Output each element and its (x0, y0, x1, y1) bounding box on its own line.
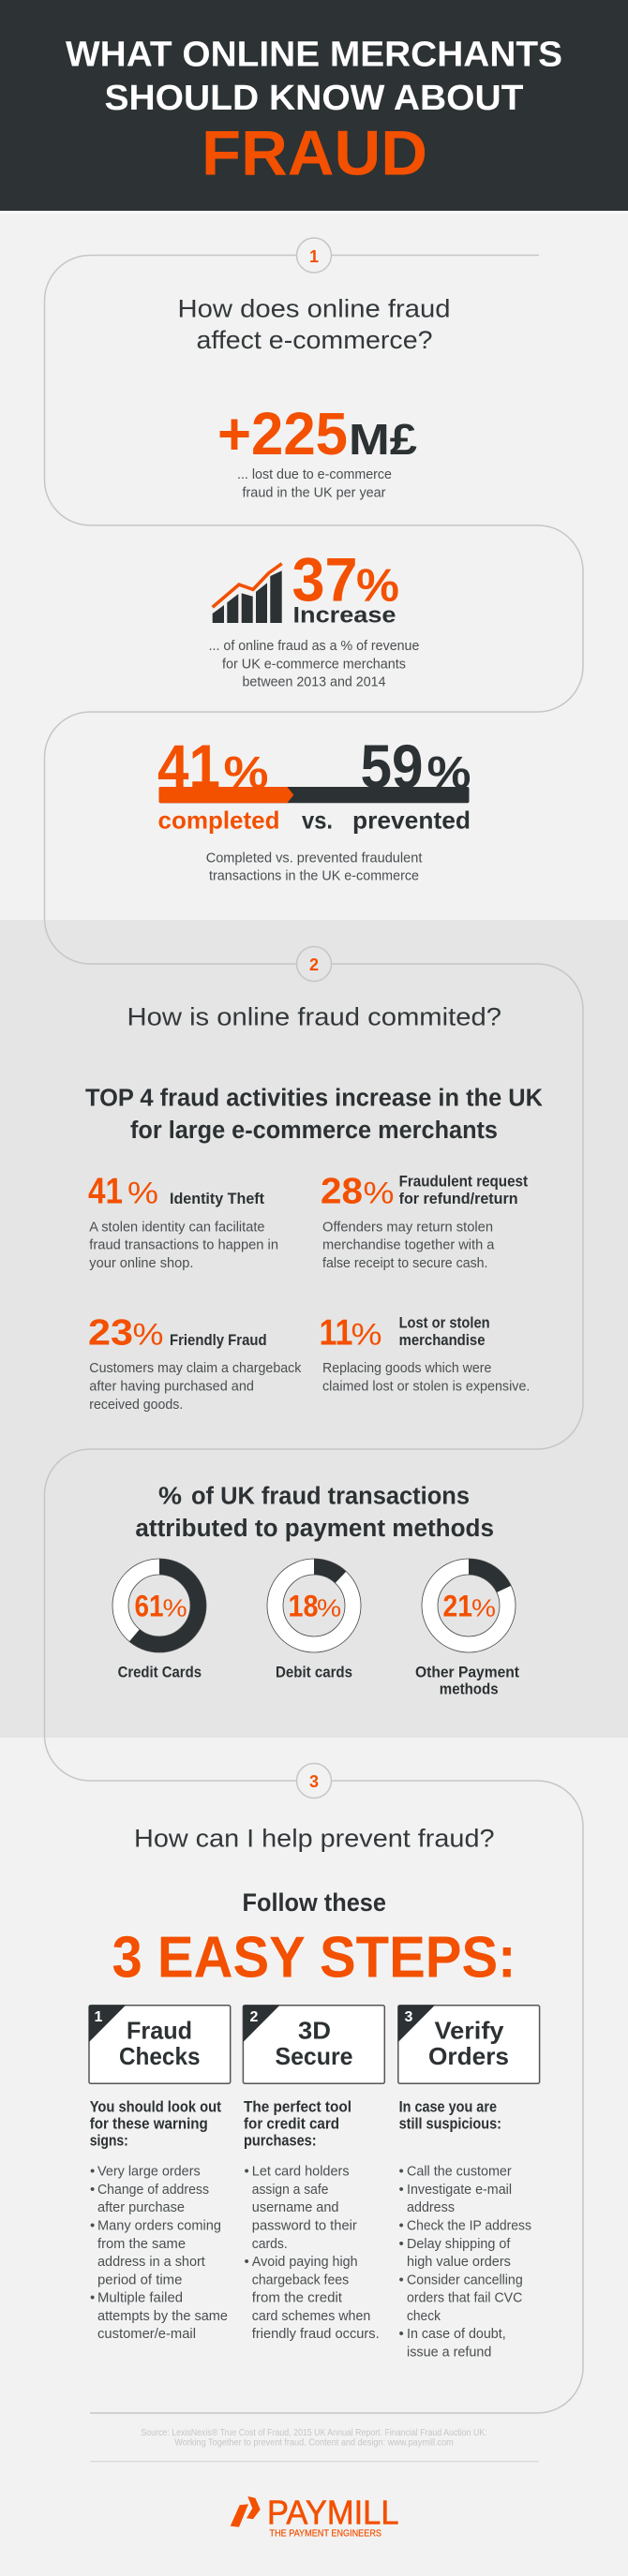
stat: 225M pounds lost: ... lost due to e-commerce (237, 466, 392, 482)
step marker 2 (296, 946, 332, 982)
heading: how does online fraud affect e-commerce (178, 295, 450, 354)
heading: top 4 fraud activities: TOP 4 fraud activities increase in the UK (85, 1085, 544, 1111)
step 1 details: warning signs: You should look out (90, 2098, 221, 2115)
source note: Source: LexisNexis® True Cost of Fraud, 2015 UK Annual Report. Financial Fraud Auction UK: (141, 2427, 487, 2438)
step 1 details: warning signs: Very large orders (97, 2164, 201, 2180)
fraud activity: lost or stolen merchandise: Lost or stolen (399, 1315, 490, 1332)
donut chart: debit cards 18%: 18 (289, 1589, 319, 1622)
fraud activity: identity theft: % (127, 1177, 158, 1210)
fraud activity: friendly fraud: % (133, 1317, 163, 1351)
step 2 details: credit card tool: Avoid paying high (252, 2254, 358, 2270)
stat: 37% increase (292, 545, 399, 628)
connector line (44, 255, 583, 2413)
text: online fraud as percent of revenue: ... of online fraud as a % of revenue (209, 638, 419, 654)
step card 2: 3D secure: 3D (298, 2017, 331, 2045)
header banner: FRAUD (202, 117, 427, 188)
fraud activity: friendly fraud: 23 (88, 1312, 133, 1353)
text: completed vs prevented caption: transactions in the UK e-commerce (209, 868, 419, 884)
step marker 1: 1 (309, 247, 319, 266)
step 2 details: credit card tool: password to their (252, 2218, 357, 2233)
step card 1: fraud checks (89, 2006, 231, 2083)
step 3 details: verification actions (399, 2098, 531, 2360)
donut chart: credit cards 61%: Credit Cards (118, 1665, 202, 1681)
stat: 225M pounds lost: fraud in the UK per year (242, 485, 386, 501)
step card 2: 3D secure: 2 (250, 2009, 259, 2025)
step 3 details: verification actions: • (399, 2182, 404, 2198)
heading: follow these 3 easy steps: 3 EASY STEPS: (112, 1926, 516, 1991)
step 1 details: warning signs: from the same (97, 2236, 186, 2252)
fraud activity: identity theft: fraud transactions to happen in (89, 1237, 278, 1253)
step 3 details: verification actions: Call the customer (407, 2164, 512, 2180)
fraud activity: friendly fraud: Friendly Fraud (170, 1332, 267, 1349)
chart: completed vs prevented bar: vs. (302, 806, 333, 834)
chart: completed vs prevented bar: % (427, 748, 471, 798)
step 1 details: warning signs: after purchase (97, 2199, 185, 2215)
step 1 details: warning signs: signs: (90, 2132, 128, 2149)
step 2 details: credit card tool: card schemes when (252, 2308, 370, 2324)
logo: Paymill (231, 2493, 399, 2539)
step 3 details: verification actions: Investigate e-mail (407, 2182, 512, 2198)
donut chart: credit cards 61%: % (163, 1593, 187, 1621)
heading: how is online fraud commited: How is online fraud commited? (127, 1003, 501, 1031)
donut chart: credit cards 61%: 61 (135, 1589, 163, 1622)
heading: percent of UK fraud transactions: % (158, 1484, 182, 1510)
step 2 details: credit card tool: The perfect tool (244, 2098, 351, 2115)
step 1 details: warning signs: • (90, 2164, 95, 2180)
stat: 37% increase: Increase (292, 602, 396, 628)
step 3 details: verification actions: address (407, 2199, 455, 2215)
step 1 details: warning signs: • (90, 2218, 95, 2233)
stat: 37% increase: % (356, 560, 399, 611)
fraud activity: friendly fraud: Customers may claim a chargeback (89, 1360, 302, 1376)
step 3 details: verification actions: still suspicious: (399, 2115, 501, 2132)
chart: completed vs prevented bar (157, 732, 471, 834)
text: online fraud as percent of revenue: between 2013 and 2014 (242, 674, 386, 690)
heading: percent of UK fraud transactions (135, 1484, 494, 1542)
text: online fraud as percent of revenue: for UK e-commerce merchants (222, 656, 406, 672)
donut chart: other payment methods 21%: Other Payment (415, 1665, 519, 1681)
source note: Working Together to prevent fraud. Content and design: www.paymill.com (174, 2437, 454, 2449)
step 2 details: credit card tool: from the credit (252, 2290, 343, 2306)
fraud activity: identity theft (88, 1171, 278, 1271)
step 2 details: credit card tool: purchases: (244, 2132, 317, 2149)
fraud activity: fraudulent refund request: Offenders may return stolen (322, 1219, 493, 1235)
step 2 details: credit card tool: username and (252, 2199, 339, 2215)
step 3 details: verification actions: In case you are (399, 2098, 497, 2115)
step marker 1 (296, 238, 332, 273)
heading: top 4 fraud activities: for large e-commerce merchants (130, 1118, 498, 1144)
step 2 details: credit card tool: chargeback fees (252, 2272, 349, 2287)
step 2 details: credit card tool: • (244, 2164, 249, 2180)
step 2 details: credit card tool: cards. (252, 2236, 288, 2252)
text: completed vs prevented caption: Completed vs. prevented fraudulent (206, 850, 423, 866)
fraud activity: identity theft: A stolen identity can facilitate (89, 1219, 264, 1235)
header banner: WHAT ONLINE MERCHANTS (66, 35, 562, 74)
step card 1: fraud checks: 1 (95, 2009, 103, 2025)
heading: follow these 3 easy steps: Follow these (242, 1888, 386, 1917)
step 3 details: verification actions: • (399, 2326, 404, 2342)
fraud activity: fraudulent refund request: false receipt to secure cash. (322, 1255, 487, 1271)
step 1 details: warning signs: address in a short (97, 2254, 206, 2270)
chart: completed vs prevented bar: completed (157, 806, 279, 834)
chart: completed vs prevented bar: % (223, 748, 268, 798)
fraud activity: identity theft: 41 (88, 1171, 123, 1212)
fraud activity: identity theft: your online shop. (89, 1255, 193, 1271)
step 3 details: verification actions: issue a refund (407, 2344, 491, 2360)
step card 1: fraud checks: Fraud (127, 2017, 192, 2045)
donut chart: credit cards 61% (112, 1559, 206, 1681)
step card 1: fraud checks: Checks (119, 2042, 201, 2070)
step marker 2: 2 (309, 955, 319, 974)
heading: top 4 fraud activities (85, 1085, 544, 1144)
stat: 225M pounds lost: M£ (349, 415, 417, 464)
chart: completed vs prevented bar: 41 (157, 732, 220, 801)
fraud activity: lost or stolen merchandise: claimed lost or stolen is expensive. (322, 1379, 530, 1394)
step 1 details: warning signs: for these warning (90, 2115, 208, 2132)
step 2 details: credit card tool: for credit card (244, 2115, 339, 2132)
step 3 details: verification actions: • (399, 2236, 404, 2252)
step card 3: verify orders: Verify (435, 2017, 504, 2045)
step 1 details: warning signs: customer/e-mail (97, 2326, 196, 2342)
step card 3: verify orders (398, 2006, 540, 2083)
step 1 details: warning signs: attempts by the same (97, 2308, 228, 2324)
header banner: SHOULD KNOW ABOUT (105, 79, 523, 118)
step 3 details: verification actions: Check the IP address (407, 2218, 531, 2233)
fraud activity: lost or stolen merchandise: Replacing goods which were (322, 1360, 491, 1376)
step 2 details: credit card tool (244, 2098, 380, 2342)
fraud activity: fraudulent refund request (321, 1171, 528, 1271)
step marker 3: 3 (309, 1772, 319, 1791)
step 1 details: warning signs: • (90, 2290, 95, 2306)
step 3 details: verification actions: In case of doubt, (407, 2326, 506, 2342)
heading: percent of UK fraud transactions: attributed to payment methods (135, 1516, 494, 1542)
logo: Paymill: PAYMILL (267, 2493, 399, 2531)
logo: Paymill: THE PAYMENT ENGINEERS (270, 2528, 381, 2539)
heading: how does online fraud affect e-commerce: affect e-commerce? (197, 326, 433, 354)
step 1 details: warning signs: Multiple failed (97, 2290, 183, 2306)
step 2 details: credit card tool: Let card holders (252, 2164, 350, 2180)
heading: how can I help prevent fraud: How can I help prevent fraud? (134, 1825, 495, 1853)
donut chart: other payment methods 21%: % (471, 1593, 496, 1621)
step 2 details: credit card tool: assign a safe (252, 2182, 328, 2198)
step 3 details: verification actions: • (399, 2164, 404, 2180)
fraud activity: fraudulent refund request: for refund/return (399, 1191, 518, 1207)
step card 2: 3D secure (243, 2006, 384, 2083)
donut chart: debit cards 18%: Debit cards (276, 1665, 352, 1681)
text: completed vs prevented caption (206, 850, 423, 884)
stat: 37% increase: 37 (292, 545, 358, 614)
step 3 details: verification actions: • (399, 2272, 404, 2287)
donut chart: other payment methods 21%: methods (440, 1681, 499, 1698)
fraud activity: fraudulent refund request: % (364, 1177, 394, 1210)
source note (141, 2427, 487, 2449)
step 1 details: warning signs: Change of address (97, 2182, 209, 2198)
heading: follow these 3 easy steps (112, 1888, 516, 1991)
heading: percent of UK fraud transactions: of UK fraud transactions (191, 1484, 470, 1510)
step 3 details: verification actions: high value orders (407, 2254, 511, 2270)
step marker 3 (296, 1763, 332, 1799)
fraud activity: fraudulent refund request: Fraudulent request (399, 1174, 528, 1191)
step 3 details: verification actions: Consider cancelling (407, 2272, 523, 2287)
stat: 225M pounds lost: +225 (217, 400, 348, 467)
step card 3: verify orders: Orders (428, 2042, 509, 2070)
text: online fraud as percent of revenue (209, 638, 419, 690)
step 3 details: verification actions: Delay shipping of (407, 2236, 511, 2252)
donut chart: debit cards 18%: % (317, 1593, 341, 1621)
fraud activity: lost or stolen merchandise: merchandise (399, 1332, 486, 1349)
fraud activity: friendly fraud (88, 1312, 302, 1413)
step card 3: verify orders: 3 (405, 2009, 413, 2025)
chart: completed vs prevented bar: 59 (360, 732, 424, 801)
fraud activity: fraudulent refund request: 28 (321, 1171, 363, 1212)
step card 2: 3D secure: Secure (276, 2042, 352, 2070)
donut chart: other payment methods 21% (415, 1559, 519, 1698)
donut chart: debit cards 18% (267, 1559, 361, 1681)
heading: how does online fraud affect e-commerce: How does online fraud (178, 295, 450, 323)
fraud activity: friendly fraud: after having purchased and (89, 1379, 254, 1394)
fraud activity: identity theft: Identity Theft (170, 1191, 264, 1207)
fraud activity: fraudulent refund request: merchandise together with a (322, 1237, 495, 1253)
fraud activity: lost or stolen merchandise: % (351, 1317, 382, 1351)
step 2 details: credit card tool: friendly fraud occurs. (252, 2326, 380, 2342)
header banner (0, 0, 628, 211)
chart: completed vs prevented bar: prevented (352, 806, 471, 834)
step 1 details: warning signs: Many orders coming (97, 2218, 221, 2233)
step 3 details: verification actions: orders that fail CVC (407, 2290, 522, 2306)
step 1 details: warning signs: • (90, 2182, 95, 2198)
stat: 225M pounds lost (217, 400, 417, 501)
icon: rising bar chart (213, 564, 282, 623)
fraud activity: lost or stolen merchandise (319, 1312, 530, 1394)
fraud activity: lost or stolen merchandise: 11 (319, 1312, 352, 1353)
step 1 details: warning signs (90, 2098, 228, 2342)
step 2 details: credit card tool: • (244, 2254, 249, 2270)
step 1 details: warning signs: period of time (97, 2272, 182, 2287)
step 3 details: verification actions: • (399, 2218, 404, 2233)
donut chart: other payment methods 21%: 21 (442, 1589, 472, 1622)
step 3 details: verification actions: check (407, 2308, 441, 2324)
fraud activity: friendly fraud: received goods. (89, 1397, 183, 1413)
